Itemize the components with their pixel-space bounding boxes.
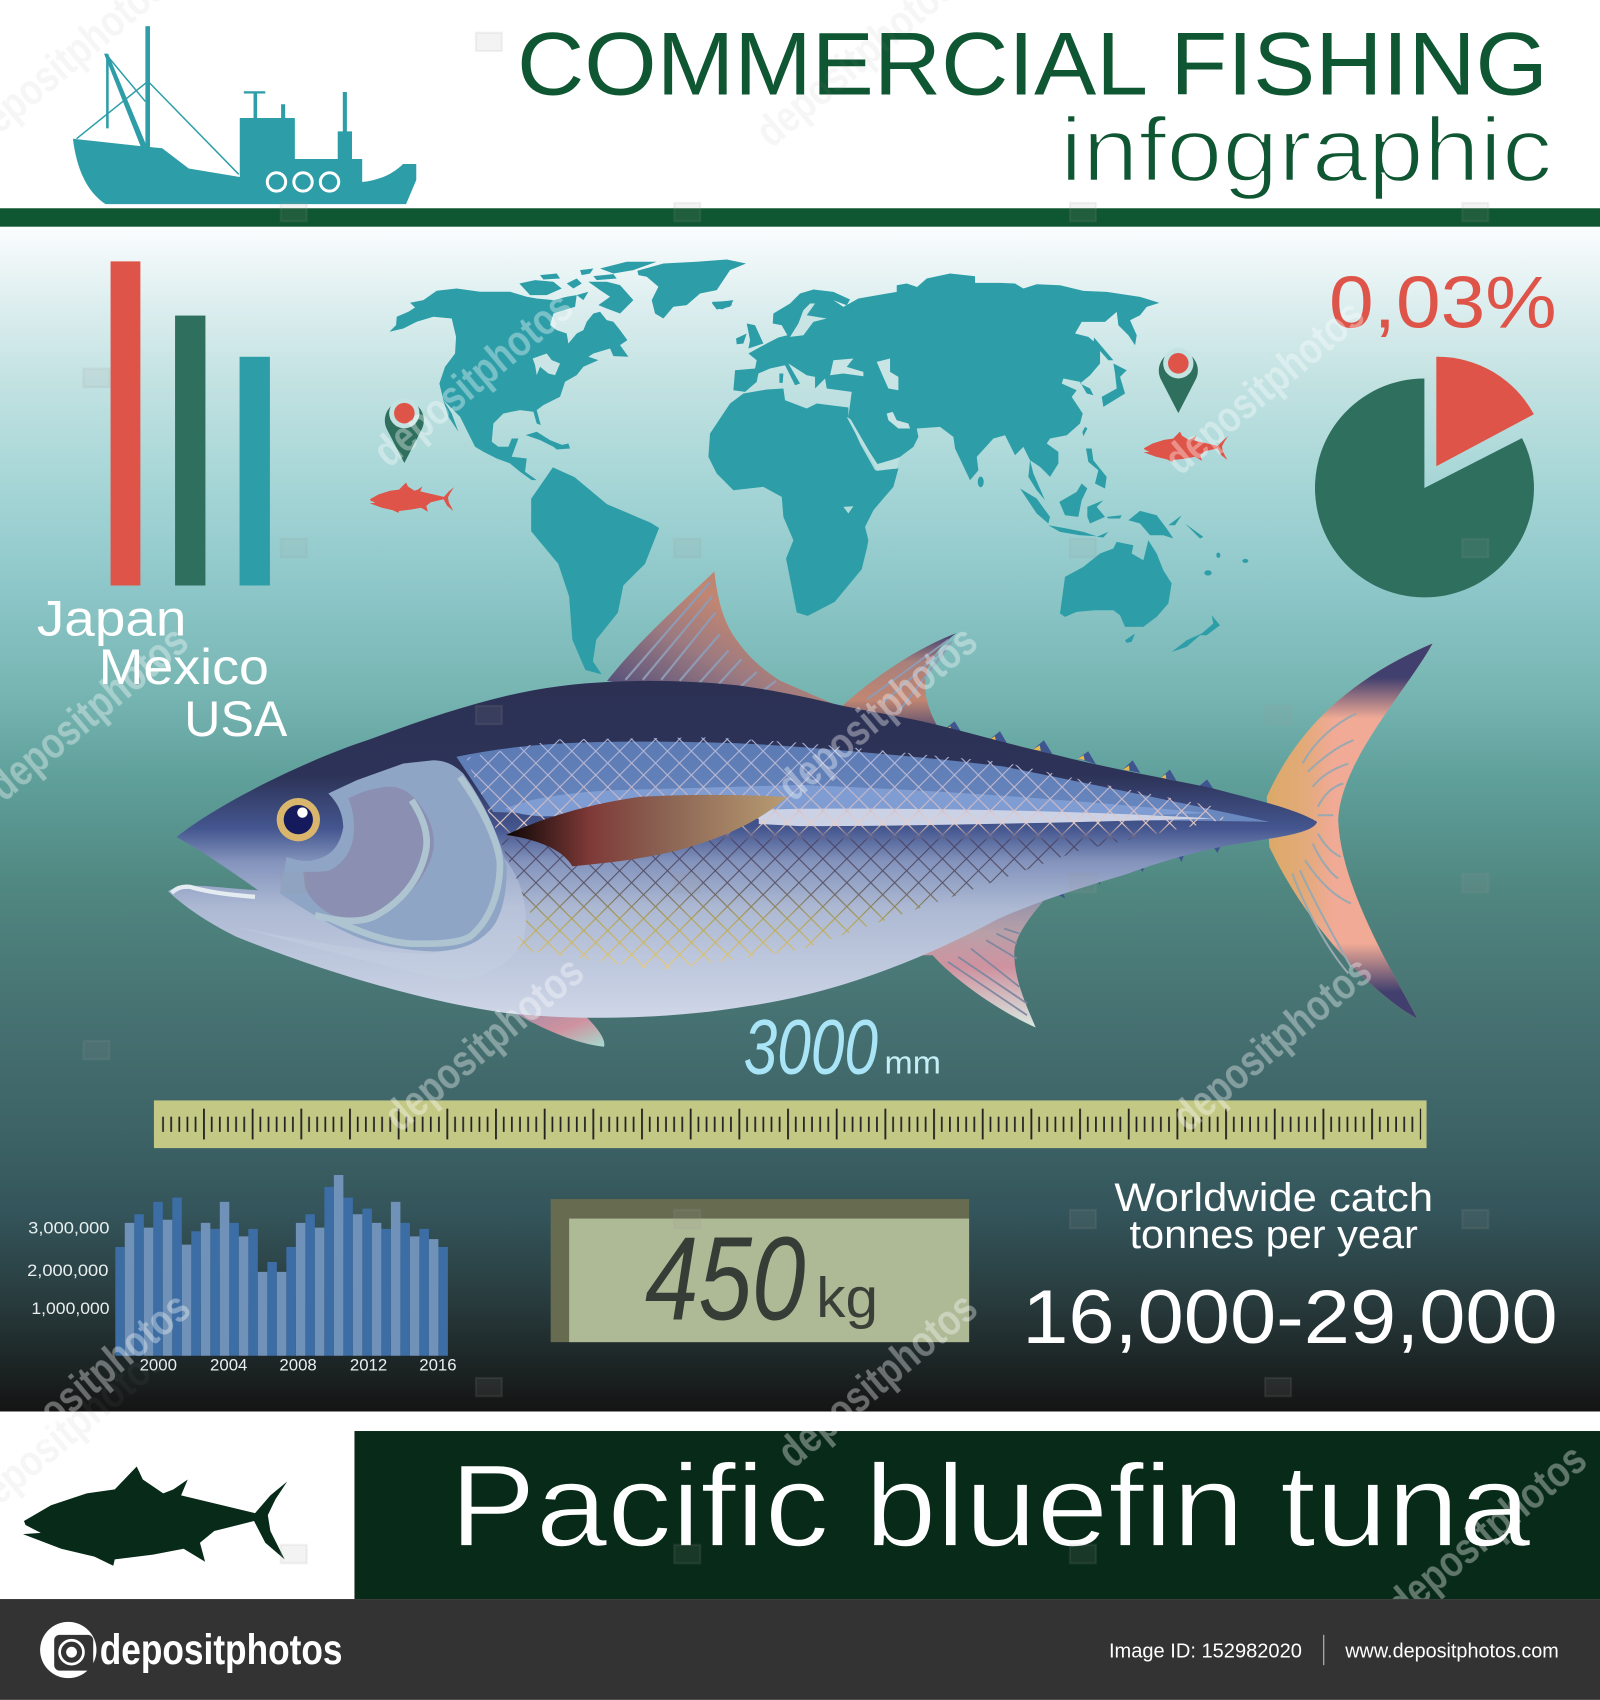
bar chart: catch by year: [27, 1175, 457, 1374]
icon: red fish, japan: [1144, 432, 1228, 462]
pale lateral stripe: [759, 809, 1214, 826]
weight display: kg: [816, 1266, 878, 1329]
chart y axis labels: 1,000,000: [31, 1299, 109, 1318]
second dorsal fin: [841, 633, 956, 729]
title: COMMERCIAL FISHING: [517, 14, 1548, 113]
ruler: [154, 1100, 1427, 1148]
weight display: [551, 1199, 969, 1345]
subtitle: infographic: [1060, 100, 1552, 201]
worldwide catch text: tonnes per year: [1130, 1213, 1418, 1257]
website url: www.depositphotos.com: [1344, 1641, 1559, 1663]
pectoral fin: [506, 795, 787, 866]
watermarks: depositphotos: [769, 1283, 987, 1477]
icon: fishing boat: [73, 26, 416, 204]
chart x axis labels: 2016: [419, 1355, 457, 1374]
north america, greenland and caribbean: [389, 259, 746, 480]
catch figure: 16,000-29,000: [1022, 1275, 1558, 1360]
tail fin: [1267, 644, 1433, 1019]
icon: depositphotos camera logo: [40, 1622, 96, 1678]
chart y axis labels: [27, 1219, 109, 1318]
map pin: japan: [1159, 348, 1198, 413]
finlets: [943, 721, 1221, 899]
illustration: bluefin tuna: [168, 571, 1433, 1047]
name strip background: [0, 1412, 1600, 1599]
species name panel: Pacific bluefin tuna: [450, 1440, 1532, 1571]
fish body: [168, 681, 1317, 1018]
chart x axis labels: 2000: [140, 1355, 177, 1374]
world map: [389, 259, 1248, 674]
ocean gradient background: [0, 227, 1600, 1412]
header background: [0, 0, 1600, 208]
watermarks: depositphotos: [1156, 290, 1374, 484]
country labels: Mexico: [99, 639, 269, 695]
length readout: 3000: [744, 1002, 878, 1090]
bar chart: countries: [111, 261, 270, 586]
watermarks: depositphotos: [365, 283, 582, 476]
chart bars: [115, 1175, 448, 1356]
species name panel: [354, 1431, 1600, 1599]
blue lateral band: [456, 742, 1269, 822]
head plates: [172, 760, 526, 981]
worldwide catch text: [1114, 1176, 1433, 1257]
watermarks: depositphotos: [769, 617, 987, 810]
chart x axis labels: 2012: [350, 1355, 387, 1374]
watermarks: depositphotos: [375, 947, 593, 1141]
faint watermarks on white header: [0, 0, 965, 1528]
scale net pattern: [467, 737, 1224, 970]
eye: [277, 798, 320, 841]
country labels: USA: [184, 691, 288, 747]
watermarks: depositphotos: [1163, 947, 1381, 1141]
chart y axis labels: 3,000,000: [28, 1219, 109, 1238]
anal fin: [910, 894, 1050, 1028]
chart x axis labels: [140, 1355, 457, 1374]
watermarks: [0, 283, 1596, 1629]
icon: tuna silhouette: [23, 1466, 287, 1566]
icon: red fish, mexico: [370, 483, 454, 513]
worldwide catch text: Worldwide catch: [1114, 1176, 1433, 1220]
weight display: 450: [645, 1212, 805, 1345]
africa, eurasia and nearby islands: [708, 274, 1159, 616]
pie chart: [1315, 357, 1534, 597]
depositphotos wordmark: depositphotos: [100, 1626, 343, 1673]
first dorsal fin: [607, 571, 838, 706]
chart x axis labels: 2004: [210, 1355, 247, 1374]
country labels: Japan: [37, 590, 186, 646]
southeast asia, australia and oceania: [1020, 449, 1248, 652]
chart x axis labels: 2008: [279, 1355, 317, 1374]
header divider bar: [0, 208, 1600, 227]
pelvic fin: [507, 1008, 604, 1047]
percentage label: 0,03%: [1329, 261, 1557, 344]
watermark camera icons: [83, 33, 1488, 1563]
image id: Image ID: 152982020: [1109, 1641, 1302, 1663]
light lateral stripe: [505, 785, 1208, 816]
country labels: [37, 590, 288, 747]
south america: [531, 467, 659, 674]
map pin: mexico: [385, 398, 424, 463]
length readout: mm: [885, 1044, 941, 1080]
footer bar: [0, 1599, 1600, 1700]
chart y axis labels: 2,000,000: [27, 1261, 108, 1280]
